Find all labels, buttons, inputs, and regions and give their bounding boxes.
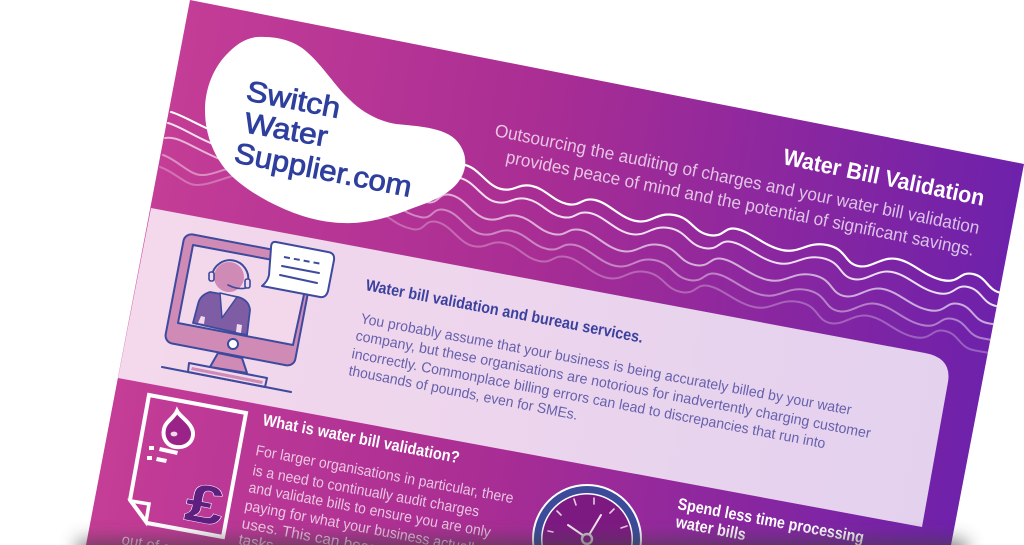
logo: Switch Water Supplier.com: Switch (244, 75, 343, 125)
text block: bureau services: company, but these organisations are notorious for inadvertently charging customer (354, 328, 872, 442)
logo: Switch Water Supplier.com (205, 37, 465, 223)
text block: bureau services: incorrectly. Commonplace billing errors can lead to discrepancies that run into (350, 346, 827, 452)
text block: what is water bill validation: is a need to continually audit charges (251, 462, 481, 520)
logo: Switch Water Supplier.com: Supplier.com (232, 137, 414, 204)
text block: what is water bill validation (120, 442, 515, 545)
subtitle: provides peace of mind and the potential of significant savings. (504, 147, 976, 260)
text block: what is water bill validation: and validate bills to ensure you are only (247, 479, 493, 541)
text block: bureau services: You probably assume that your business is being accurately billed by your water (359, 311, 853, 419)
icon: clock (532, 484, 642, 545)
logo: Switch Water Supplier.com: Water (242, 107, 330, 154)
icon: bill document with drop and pound sign (130, 395, 246, 537)
text block: what is water bill validation: For larger organisations in particular, there (254, 442, 515, 507)
title: Water Bill Validation (781, 143, 987, 211)
text block: bureau services: thousands of pounds, even for SMEs. (347, 363, 579, 424)
bottom shadow (78, 540, 966, 545)
decorative waves (160, 112, 1024, 359)
panel: bureau services (118, 208, 949, 527)
icon: monitor with call-centre agent (162, 233, 315, 392)
subtitle: Outsourcing the auditing of charges and your water bill validation (493, 120, 981, 238)
heading: what is water bill validation: What is water bill validation? (261, 411, 461, 467)
heading: bureau services: Water bill validation and bureau services. (364, 277, 644, 347)
icon: speech bubble (262, 242, 334, 297)
icon: bill document with drop and pound sign: £ (181, 471, 229, 537)
